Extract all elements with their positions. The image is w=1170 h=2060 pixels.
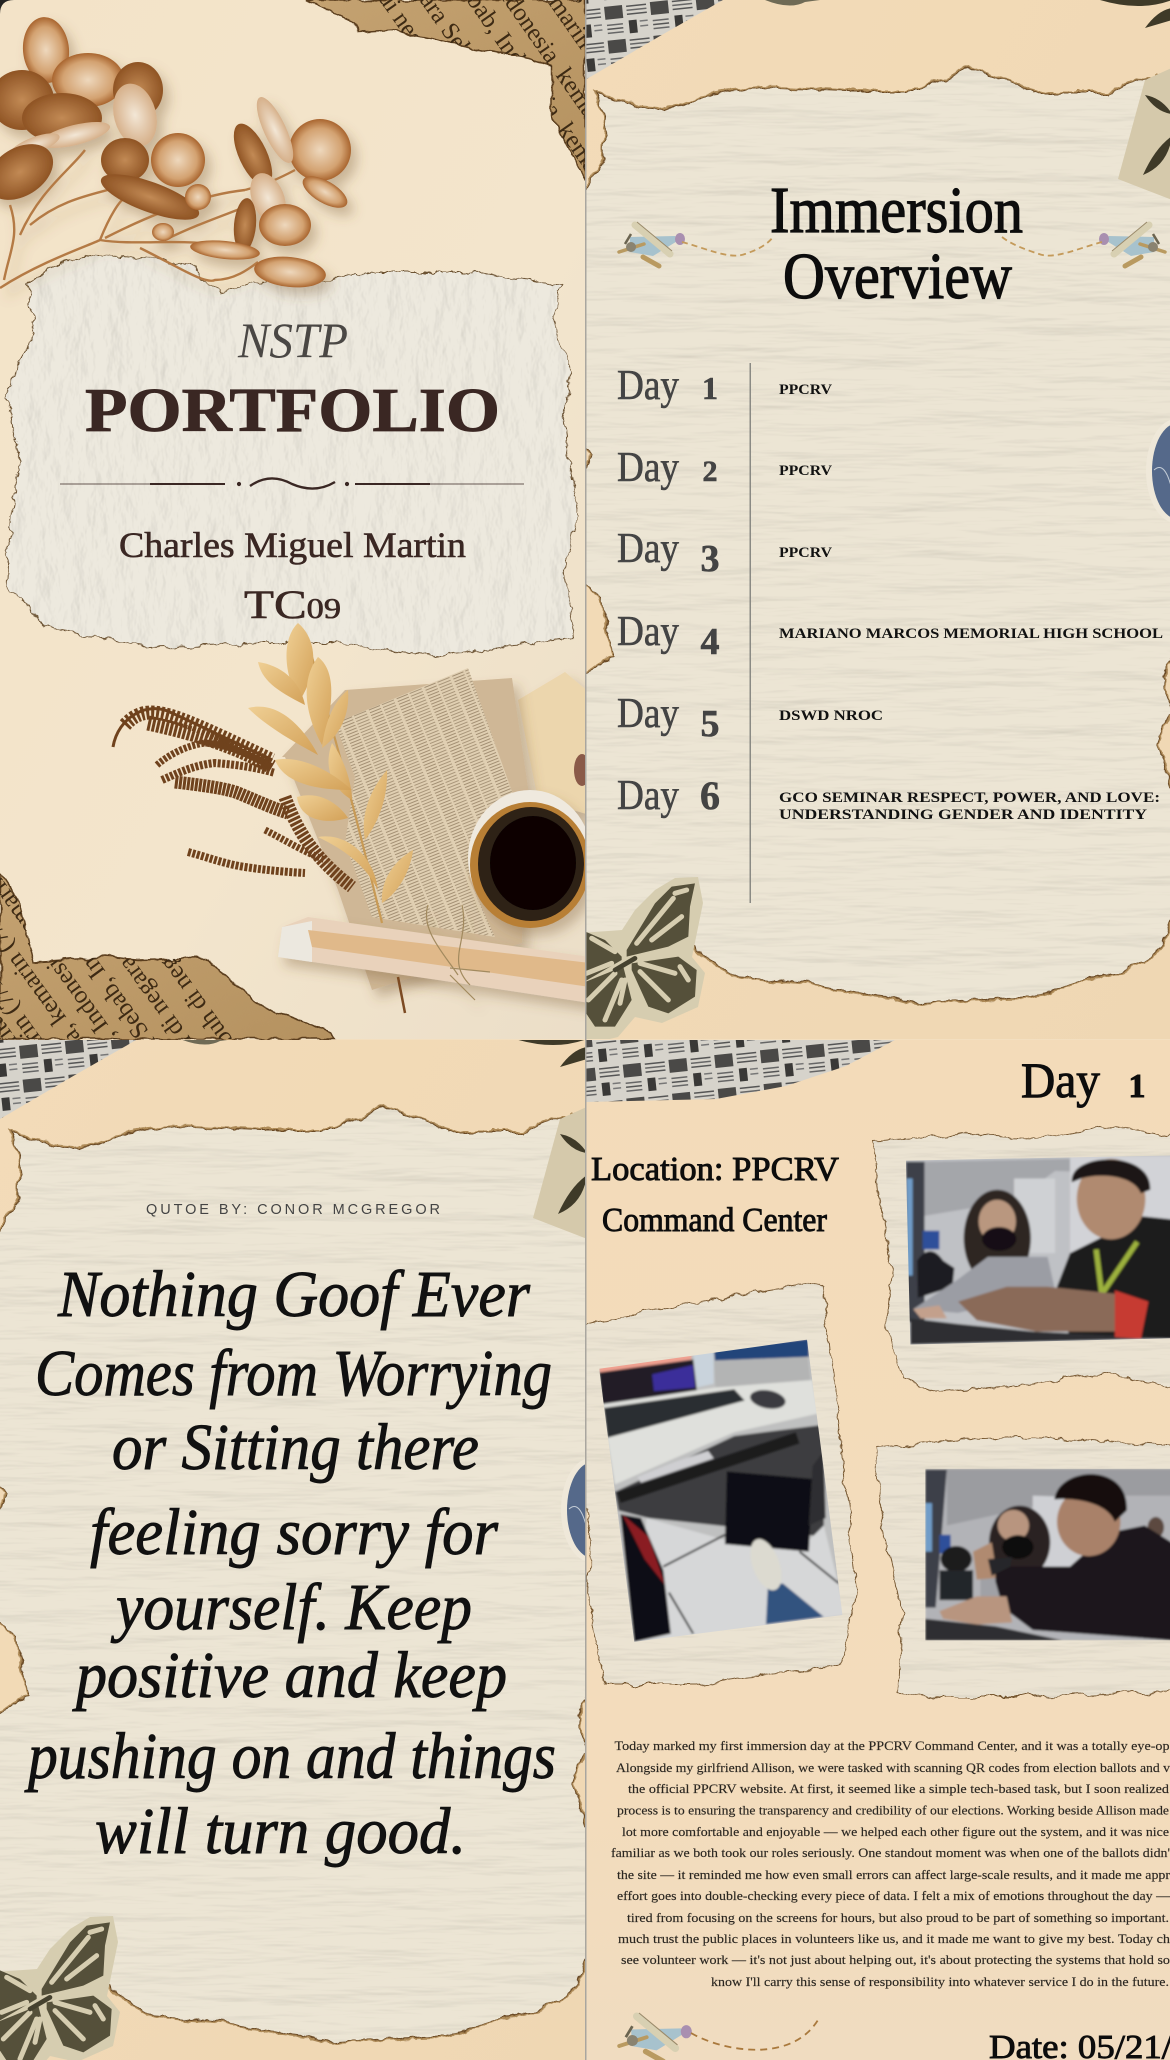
plane with dashed trail	[619, 2013, 818, 2060]
day list: Day	[617, 526, 679, 572]
day list	[617, 363, 720, 819]
quote text	[24, 1258, 556, 1868]
right paper	[518, 672, 590, 815]
butterfly	[0, 1916, 120, 2060]
panel: immersion overview	[575, 0, 1170, 1045]
heading: Day 1	[1021, 1052, 1146, 1108]
section code: TC 09	[244, 582, 341, 627]
quote attribution: QUTOE BY: CONOR MCGREGOR	[146, 1202, 440, 1218]
quote text: yourself. Keep	[110, 1571, 472, 1644]
newspaper strip	[0, 1039, 235, 1119]
location labels: GCO SEMINAR RESPECT, POWER, AND LOVE:	[779, 790, 1160, 806]
heading: Immersion Overview	[770, 174, 1023, 313]
location labels: PPCRV	[779, 463, 833, 479]
heading: Immersion Overview: Overview	[783, 240, 1012, 313]
quote text: feeling sorry for	[90, 1496, 498, 1569]
reflection paragraph: Alongside my girlfriend Allison, we were tasked with scanning QR codes from election ballots and v	[616, 1760, 1170, 1775]
reflection paragraph: familiar as we both took our roles seriously. One standout moment was when one of the ballots didn'	[611, 1845, 1170, 1860]
coffee cup	[468, 790, 592, 928]
location labels: MARIANO MARCOS MEMORIAL HIGH SCHOOL	[779, 626, 1163, 642]
quote text: Nothing Goof Ever	[57, 1258, 530, 1331]
heading: Immersion Overview: Immersion	[770, 174, 1023, 247]
day list: 2	[702, 455, 718, 488]
twig below scroll	[398, 977, 405, 1013]
day list: Day	[617, 609, 679, 655]
location labels	[779, 382, 1163, 823]
day list: Day	[617, 773, 679, 819]
timeline rule	[750, 363, 751, 903]
location heading: Command Center	[602, 1202, 828, 1239]
quote text: positive and keep	[72, 1639, 507, 1712]
subtitle: NSTP: NSTP	[237, 312, 348, 368]
photo: volunteers scanning, top	[902, 1152, 1170, 1346]
torn paper card	[6, 255, 578, 656]
tape with leaves	[518, 1040, 585, 1238]
newspaper strip	[585, 0, 820, 80]
panel: cover	[0, 0, 585, 1040]
location labels: UNDERSTANDING GENDER AND IDENTITY	[779, 807, 1148, 823]
torn newspaper top right	[305, 0, 585, 181]
reflection paragraph: process is to ensuring the transparency and credibility of our elections. Working beside Allison made	[617, 1802, 1169, 1818]
location labels: DSWD NROC	[779, 708, 883, 724]
photo: desk and computer	[596, 1335, 846, 1645]
reflection paragraph: tired from focusing on the screens for hours, but also proud to be part of something so important.	[627, 1910, 1169, 1925]
day list: 3	[700, 538, 720, 580]
reflection paragraph: much trust the public places in volunteers like us, and it made me want to give my best. Today ch	[618, 1931, 1170, 1946]
photo frame left	[575, 1284, 857, 1684]
plane right with dashed trail	[1002, 222, 1165, 266]
plane left with dashed trail	[619, 222, 773, 266]
day list: Day	[617, 691, 679, 737]
location heading	[591, 1151, 839, 1239]
location labels: PPCRV	[779, 545, 833, 561]
photo: volunteers scanning, lower	[925, 1469, 1170, 1640]
torn newspaper bottom left: tambuh di negara Sebab, Indonesia	[9, 808, 237, 1107]
author name: Charles Miguel Martin	[119, 525, 466, 565]
reflection paragraph: lot more comfortable and enjoyable — we helped each other figure out the system, and it was nice	[622, 1824, 1169, 1839]
globe fragment	[1146, 419, 1170, 523]
torn newspaper bottom left: b, tambuh di negara, Sebab	[93, 866, 275, 1102]
reflection paragraph: know I'll carry this sense of responsibility into whatever service I do in the future.	[711, 1974, 1169, 1989]
day list: Day	[617, 363, 679, 409]
dried flowers	[0, 15, 352, 291]
heading: Day 1: Day	[1021, 1052, 1100, 1108]
butterfly	[580, 877, 705, 1045]
heading: Day 1: 1	[1128, 1068, 1146, 1105]
panel divider vertical	[585, 0, 586, 2060]
aged paper sheet	[575, 68, 1170, 1003]
reflection paragraph: the site — it reminded me how even small errors can affect large-scale results, and it made me appr	[617, 1867, 1170, 1882]
still life: newspapers, coffee, scroll, leaves	[113, 623, 592, 1013]
newspaper under sheet	[282, 678, 528, 990]
title: PORTFOLIO: PORTFOLIO	[85, 377, 500, 445]
panel: day 1	[575, 1040, 1170, 2060]
panel: quote	[0, 1039, 621, 2060]
newspaper top sheet	[335, 668, 515, 937]
quote text: pushing on and things	[24, 1720, 556, 1793]
torn newspaper bottom left	[0, 873, 336, 1040]
reflection paragraph: Today marked my first immersion day at the PPCRV Command Center, and it was a totally eye-op	[614, 1738, 1170, 1753]
reflection paragraph	[611, 1738, 1170, 1989]
quote text: or Sitting there	[112, 1411, 479, 1484]
scroll	[278, 905, 590, 1003]
reflection paragraph: effort goes into double-checking every piece of data. I felt a mix of emotions throughout the day —	[617, 1888, 1170, 1903]
location heading: Location: PPCRV	[591, 1151, 839, 1188]
reflection paragraph: the official PPCRV website. At first, it seemed like a simple tech-based task, but I soon realized	[628, 1781, 1170, 1796]
newspaper strip	[585, 1040, 895, 1102]
day list: 4	[700, 621, 720, 663]
quote text: Comes from Worrying	[35, 1337, 552, 1410]
quote text: will turn good.	[95, 1795, 466, 1868]
dark feather fronds	[113, 709, 352, 887]
photo frame top right	[874, 1125, 1170, 1392]
chestnut	[574, 754, 590, 786]
photo frame lower right	[874, 1437, 1170, 1697]
day list: 5	[700, 703, 720, 745]
location labels: PPCRV	[779, 382, 833, 398]
aged paper sheet	[0, 1107, 595, 2042]
tape with leaves	[1100, 0, 1170, 205]
ornamental divider	[60, 478, 524, 489]
golden leaves	[248, 623, 413, 923]
day list: 6	[700, 773, 720, 818]
reflection paragraph: see volunteer work — it's not just about helping out, it's about protecting the systems that hold so	[621, 1952, 1170, 1967]
globe fragment	[562, 1460, 585, 1560]
day list: 1	[702, 370, 718, 406]
day list: Day	[617, 445, 679, 491]
